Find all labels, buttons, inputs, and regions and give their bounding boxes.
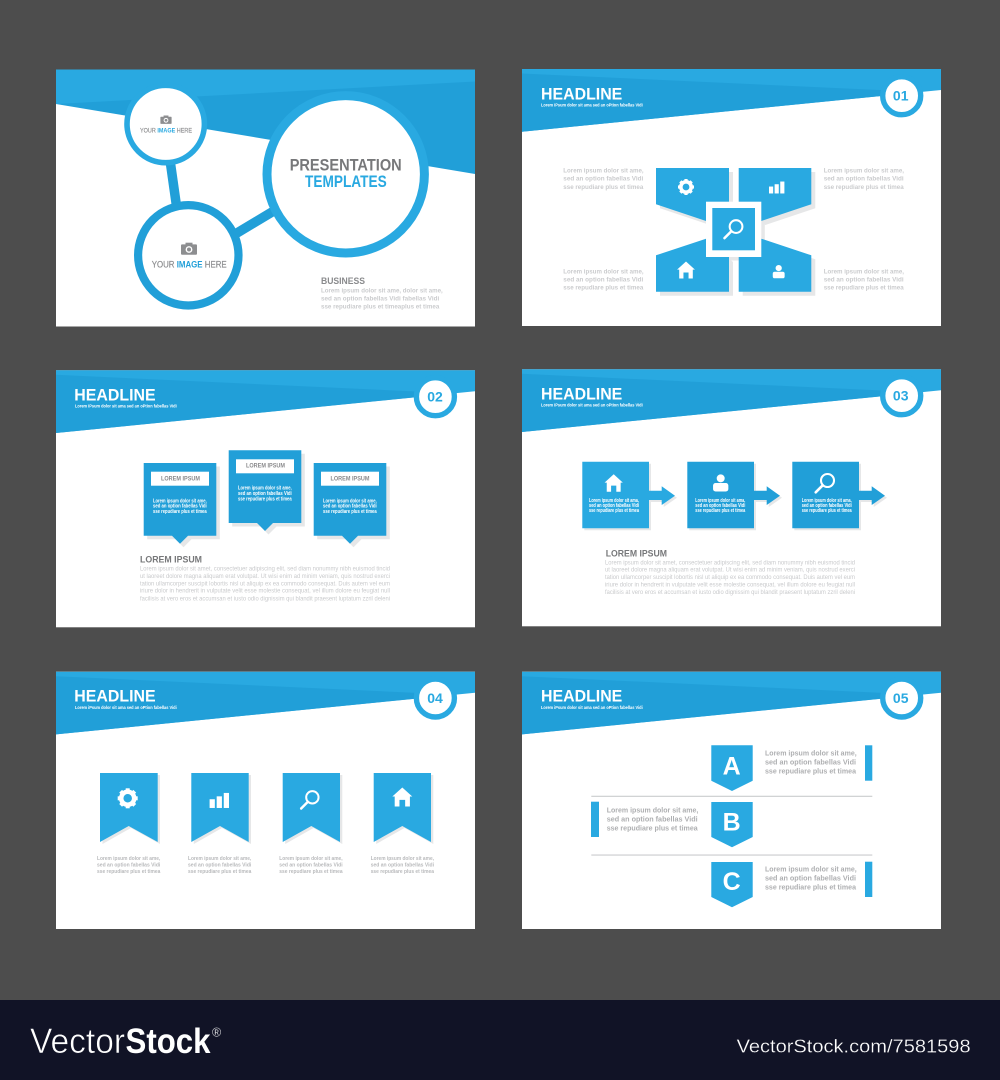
headline 03: Lorem iPsum dolor sit ama sed an oPtion fabellas Vidi (541, 403, 643, 408)
number badge 02 (416, 378, 454, 416)
title: PRESENTATION (290, 157, 402, 175)
bookmark 2 text: sed an option fabellas Vidi (188, 862, 252, 868)
number badge 05 (883, 679, 921, 717)
number badge 05: 05 (893, 690, 909, 706)
step 3 text: sed an option fabellas Vidi (802, 503, 852, 509)
icon: large camera (181, 243, 197, 255)
headline 01 (541, 85, 643, 108)
step 3 text (802, 498, 852, 514)
icon: house bookmark (392, 788, 412, 806)
icon: house (677, 262, 695, 278)
bookmark 1 text: Lorem ipsum dolor sit ame, (97, 856, 161, 862)
callout card 2: sed an option fabellas Vidi (238, 491, 292, 497)
paragraph block 03: ut laoreet dolore magna aliquam erat volutpat. Ut wisi enim ad minim veniam, quis nostrud exerci (605, 567, 855, 574)
headline 04 (74, 688, 177, 710)
step 2 text: sse repudiare plus et timea (695, 508, 745, 514)
small image caption: YOUR IMAGE HERE (140, 128, 193, 135)
callout card 3 (314, 463, 390, 547)
process step 2 (687, 462, 782, 530)
business text block: BUSINESS (321, 276, 365, 287)
paragraph block 03 (605, 548, 855, 596)
callout card 3: LOREM IPSUM (330, 476, 370, 482)
callout card 2 (229, 450, 305, 534)
panel: slide 04 (56, 672, 475, 929)
paragraph block 02 (140, 554, 390, 602)
headline 02 (74, 386, 177, 409)
text top right: sed an option fabellas Vidi (824, 176, 904, 183)
paragraph block 02: iriure dolor in hendrerit in vulputate velit esse molestie consequat, vel illum dolore eu feugiat null (140, 588, 390, 595)
row B text: Lorem ipsum dolor sit ame, (607, 805, 698, 814)
cover header band (56, 70, 475, 174)
headline 05 (541, 688, 643, 710)
footer logo: Stock (126, 1022, 211, 1061)
tag C: C (723, 868, 741, 896)
callout card 3: sse repudiare plus et timea (323, 509, 377, 515)
icon: magnifier step (816, 474, 834, 492)
process step 3 (792, 462, 887, 530)
step 2 text: Lorem ipsum dolor sit ama, (695, 498, 746, 504)
callout card 1: sse repudiare plus et timea (153, 509, 207, 515)
text top right (824, 168, 904, 191)
panel: slide 03 (522, 369, 941, 626)
step 2 text: sed an option fabellas Vidi (695, 503, 746, 509)
row C text: Lorem ipsum dolor sit ame, (765, 864, 857, 873)
panel: slide 01 (522, 69, 941, 326)
callout card 2: LOREM IPSUM (246, 464, 285, 470)
icon: magnifier (724, 220, 742, 238)
icon: bars bookmark (210, 793, 229, 808)
row A text: sed an option fabellas Vidi (765, 758, 856, 767)
row A text (765, 748, 857, 776)
number badge 01 (883, 77, 921, 115)
footer logo: ® (212, 1026, 222, 1040)
bookmark 4 text: sse repudiare plus et timea (371, 869, 435, 875)
row C bar (865, 862, 872, 897)
header band 05 (522, 672, 941, 734)
text bottom right: sed an option fabellas Vidi (824, 277, 904, 284)
bookmark 3 (279, 773, 343, 875)
business text block (321, 276, 443, 311)
number badge 03: 03 (893, 388, 909, 404)
bookmark 3 text: sse repudiare plus et timea (279, 869, 343, 875)
headline 05: Lorem iPsum dolor sit ama sed an oPtion fabellas Vidi (541, 705, 643, 710)
headline 01: Lorem iPsum dolor sit ama sed an oPtion fabellas Vidi (541, 103, 643, 108)
headline 02: HEADLINE (74, 386, 156, 404)
step 1 text: sse repudiare plus et timea (589, 508, 639, 514)
number badge 01: 01 (893, 88, 909, 104)
text bottom right: sse repudiare plus et timea (824, 285, 904, 292)
number badge 04 (416, 679, 454, 717)
bookmark 1 text (97, 856, 161, 875)
text bottom left: sse repudiare plus et timea (563, 285, 644, 292)
diagram: four blocks and centre (656, 168, 815, 296)
icon: person (773, 265, 785, 278)
icon: magnifier bookmark (301, 791, 319, 809)
bookmark 2 text (188, 856, 252, 875)
icon: person step (713, 474, 728, 492)
callout card 1: Lorem ipsum dolor sit ame, (153, 498, 207, 504)
text bottom left: Lorem ipsum dolor sit ame, (563, 269, 644, 276)
headline 01: HEADLINE (541, 85, 622, 103)
headline 04: Lorem iPsum dolor sit ama sed an oPtion fabellas Vidi (75, 705, 177, 710)
callout card 3: sed an option fabellas Vidi (323, 504, 377, 510)
paragraph block 02: tation ullamcorper suscipit lobortis nisl ut aliquip ex ea commodo consequat. Duis autem vel eum (140, 580, 390, 587)
bookmark 1 text: sed an option fabellas Vidi (97, 862, 161, 868)
footer logo (30, 1022, 222, 1061)
text top left: Lorem ipsum dolor sit ame, (563, 168, 644, 175)
panel: cover slide (56, 70, 475, 326)
paragraph block 03: facilisis at vero eros et accumsan et iusto odio dignissim qui blandit praesent luptatum zzril deleni (605, 589, 855, 596)
paragraph block 03: Lorem ipsum dolor sit amet, consectetuer adipiscing elit, sed diam nonummy nibh euismod tincid (605, 559, 855, 566)
text top left (563, 168, 644, 191)
tag C (711, 862, 753, 907)
callout card 2: sse repudiare plus et timea (238, 496, 292, 502)
icon: bars (769, 182, 784, 193)
medium image caption: YOUR IMAGE HERE (152, 260, 227, 270)
icon: small camera (160, 116, 172, 124)
row C text: sse repudiare plus et timea (765, 883, 857, 892)
row B bar (591, 802, 599, 837)
number badge 02: 02 (427, 389, 443, 405)
bookmark 4 text: Lorem ipsum dolor sit ame, (371, 856, 434, 862)
step 1 text: sed an option fabellas Vidi (589, 503, 639, 509)
step 3 text: Lorem ipsum dolor sit ama, (802, 498, 852, 504)
step 2 text (695, 498, 746, 514)
header band 01 (522, 69, 941, 132)
tag A: A (723, 752, 741, 780)
bookmark 1 text: sse repudiare plus et timea (97, 869, 161, 875)
headline 02: Lorem iPsum dolor sit ama sed an oPtion fabellas Vidi (75, 404, 177, 409)
small image circle (127, 85, 204, 163)
icon: house step (605, 474, 623, 492)
paragraph block 02: Lorem ipsum dolor sit amet, consectetuer adipiscing elit, sed diam nonummy nibh euismod tincid (140, 566, 390, 573)
step 3 text: sse repudiare plus et timea (802, 508, 852, 514)
header band 03 (522, 369, 941, 432)
callout card 2: Lorem ipsum dolor sit ame, (238, 486, 292, 492)
step 1 text (589, 498, 639, 514)
row B text: sed an option fabellas Vidi (607, 815, 698, 824)
bookmark 2 text: sse repudiare plus et timea (188, 869, 252, 875)
business text block: sed an option fabellas Vidi fabellas Vidi (321, 296, 439, 303)
row C text (765, 864, 857, 892)
business text block: sse repudiare plus et timeaplus et timea (321, 304, 440, 311)
row A bar (865, 745, 872, 781)
text top left: sed an option fabellas Vidi (563, 176, 643, 183)
tag A (711, 745, 753, 791)
row B text: sse repudiare plus et timea (607, 824, 698, 833)
text top right: sse repudiare plus et timea (824, 184, 904, 191)
headline 03: HEADLINE (541, 385, 622, 403)
process step 1 (582, 462, 677, 530)
paragraph block 02: LOREM IPSUM (140, 554, 202, 565)
headline 04: HEADLINE (74, 688, 156, 706)
bookmark 4 (371, 773, 435, 875)
headline 05: HEADLINE (541, 688, 622, 706)
row B text (607, 805, 698, 833)
number badge 03 (883, 377, 921, 415)
paragraph block 03: tation ullamcorper suscipit lobortis nisl ut aliquip ex ea commodo consequat. Duis autem vel eum (605, 574, 855, 581)
header band 04 (56, 672, 475, 734)
bookmark 2 text: Lorem ipsum dolor sit ame, (188, 856, 252, 862)
paragraph block 03: iriure dolor in hendrerit in vulputate velit esse molestie consequat, vel illum dolore eu feugiat null (605, 581, 855, 588)
headline 03 (541, 385, 643, 408)
icon: gear bookmark (118, 788, 138, 808)
paragraph block 03: LOREM IPSUM (606, 548, 667, 559)
bookmark 3 text: sed an option fabellas Vidi (279, 862, 343, 868)
subtitle: TEMPLATES (305, 173, 387, 191)
text bottom right: Lorem ipsum dolor sit ame, (824, 269, 904, 276)
callout card 1: LOREM IPSUM (161, 476, 200, 482)
bookmark 4 text: sed an option fabellas Vidi (371, 862, 434, 868)
number badge 04: 04 (427, 690, 443, 706)
footer bar (0, 1000, 1000, 1080)
text top right: Lorem ipsum dolor sit ame, (824, 168, 904, 175)
row dividers (591, 796, 872, 856)
row C text: sed an option fabellas Vidi (765, 874, 856, 883)
callout card 3: Lorem ipsum dolor sit ame, (323, 498, 377, 504)
callout card 1 (144, 463, 220, 547)
footer image id: VectorStock.com/7581598 (737, 1036, 971, 1057)
step 1 text: Lorem ipsum dolor sit ama, (589, 498, 639, 504)
tag B: B (723, 809, 741, 837)
header band 02 (56, 370, 475, 433)
text bottom left: sed an option fabellas Vidi (563, 277, 643, 284)
icon: gear (678, 179, 694, 195)
row A text: Lorem ipsum dolor sit ame, (765, 748, 857, 757)
callout card 1: sed an option fabellas Vidi (153, 504, 207, 510)
bookmark 3 text (279, 856, 343, 875)
text bottom left (563, 269, 644, 292)
text top left: sse repudiare plus et timea (563, 184, 644, 191)
bookmark 1 (97, 773, 161, 875)
paragraph block 02: ut laoreet dolore magna aliquam erat volutpat. Ut wisi enim ad minim veniam, quis nostrud exerci (140, 573, 390, 580)
bookmark 3 text: Lorem ipsum dolor sit ame, (279, 856, 343, 862)
connector between circles (170, 160, 277, 236)
panel: slide 05 (522, 672, 941, 929)
tag B (711, 802, 753, 847)
business text block: Lorem ipsum dolor sit ame, dolor sit ame, (321, 288, 443, 295)
panel: slide 02 (56, 370, 475, 627)
bookmark 4 text (371, 856, 435, 875)
text bottom right (824, 269, 904, 292)
footer logo: Vector (30, 1022, 125, 1061)
row A text: sse repudiare plus et timea (765, 767, 857, 776)
medium image circle (138, 205, 238, 306)
bookmark 2 (188, 773, 252, 875)
title circle (267, 96, 424, 253)
paragraph block 02: facilisis at vero eros et accumsan et iusto odio dignissim qui blandit praesent luptatum zzril deleni (140, 595, 390, 602)
